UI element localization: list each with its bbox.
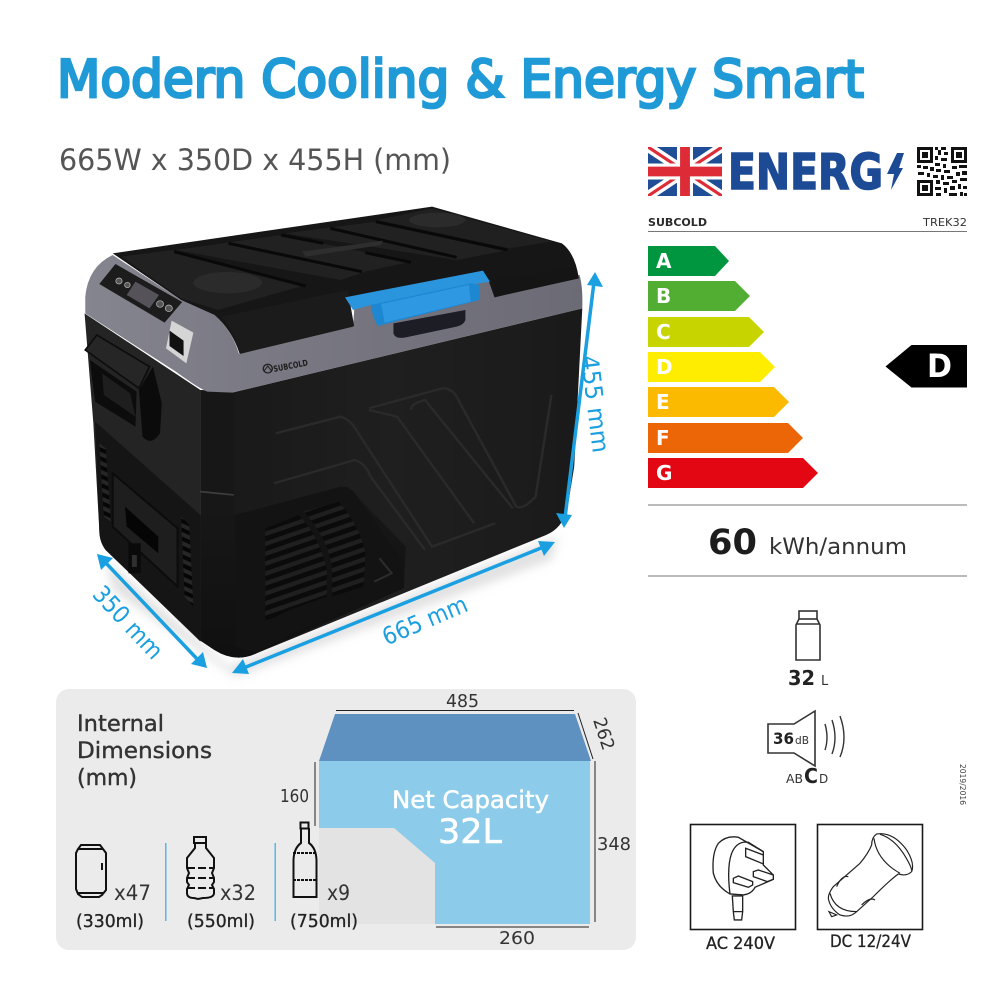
- rating B: [648, 281, 750, 311]
- icon: UK plug: [713, 837, 773, 920]
- floor shadow: [106, 537, 558, 677]
- icon: noise speaker: 36: [773, 729, 794, 748]
- model name: TREK32: [922, 216, 967, 229]
- label: AC 240V: [706, 934, 775, 954]
- title: Modern Cooling & Energy Smart: [57, 50, 864, 110]
- label: DC 12/24V: [830, 932, 911, 952]
- control panel: [99, 264, 182, 323]
- measurements: 485: [446, 691, 479, 712]
- heading: (mm): [77, 766, 137, 791]
- icon: noise speaker: [768, 711, 844, 766]
- icon: union flag: [648, 147, 722, 196]
- rating G: [648, 458, 818, 488]
- arrow: height: [556, 272, 603, 528]
- panel: internal dimensions: (330ml): [76, 911, 144, 932]
- capacity value: 32L: [438, 812, 502, 852]
- volume value: 32: [788, 666, 815, 690]
- grey lid band: [85, 255, 582, 393]
- text: bottles: x32: [220, 881, 256, 905]
- noise class: AB: [786, 772, 803, 786]
- black lid: [113, 207, 579, 354]
- noise class: [786, 764, 828, 788]
- rating marker: D: D: [927, 347, 952, 385]
- brand wordmark: SUBCOLD: [273, 358, 309, 375]
- brand logo: [263, 364, 272, 373]
- label: 665 mm: 665 mm: [378, 590, 472, 651]
- icon: water bottle: [187, 837, 214, 899]
- icon: can: [76, 845, 106, 897]
- rating A: A: [656, 249, 672, 273]
- rating B: B: [656, 284, 671, 308]
- annual energy consumption: 60: [708, 523, 757, 563]
- DC power box: [818, 824, 922, 952]
- rating D: D: [656, 355, 673, 379]
- measurements: 260: [499, 928, 535, 949]
- side socket panel: [99, 443, 193, 607]
- lid raised panels: [121, 208, 579, 353]
- measurements: 348: [597, 834, 631, 855]
- energy rating scale: [648, 246, 818, 488]
- heading: Dimensions: [77, 739, 212, 764]
- wordmark: energy: ENERG: [728, 144, 883, 201]
- measurements: 262: [588, 715, 618, 753]
- separator: [165, 843, 166, 921]
- icon: noise speaker: dB: [795, 735, 809, 747]
- icon: car charger: [828, 834, 913, 917]
- annual energy consumption: kWh/annum: [769, 535, 907, 560]
- rating C: C: [656, 320, 671, 344]
- volume value: L: [821, 674, 829, 689]
- annual energy consumption: [708, 523, 907, 563]
- separator: [274, 843, 276, 921]
- label: 455 mm: 455 mm: [575, 354, 615, 454]
- rating F: F: [656, 426, 670, 450]
- rating E: E: [656, 390, 670, 414]
- rating G: G: [656, 461, 672, 485]
- side lower recess: [95, 422, 200, 641]
- embossed front shapes: [274, 388, 551, 550]
- measurements: [280, 691, 631, 949]
- overall dimensions text: 665W x 350D x 455H (mm): [59, 143, 451, 177]
- front vent grilles: [265, 502, 392, 622]
- rating E: [648, 387, 789, 417]
- rating C: [648, 317, 764, 347]
- USB port: [166, 321, 193, 363]
- panel: internal dimensions: [56, 689, 636, 950]
- energy label header: [648, 144, 967, 201]
- left carry handle: [85, 335, 162, 441]
- icon: energy bolt: [887, 153, 904, 190]
- noise class: C: [804, 764, 818, 788]
- rating A: [648, 246, 729, 276]
- panel: internal dimensions: (750ml): [290, 911, 358, 932]
- blue handle: [345, 271, 490, 338]
- volume value: [788, 666, 829, 690]
- icon: QR code: [917, 147, 967, 196]
- label: 350 mm: 350 mm: [87, 580, 169, 665]
- box: [690, 824, 796, 930]
- rating F: [648, 423, 803, 453]
- arrow: width: [232, 541, 555, 674]
- lower base: [200, 487, 406, 658]
- rating marker: D: [886, 345, 967, 388]
- corner highlight: [200, 390, 234, 515]
- icon: volume container: [796, 611, 820, 660]
- icon: wine bottle: [293, 822, 317, 897]
- cooler side face: [85, 313, 200, 642]
- noise class: D: [819, 772, 828, 786]
- regulation number: 2019/2016: [958, 764, 967, 805]
- capacity label: Net Capacity: [392, 786, 549, 814]
- text: cans: x47: [114, 881, 151, 905]
- panel background: [56, 689, 636, 950]
- text: wine bottles: x9: [327, 881, 350, 905]
- arrow: depth: [97, 554, 207, 668]
- box: [818, 824, 922, 930]
- supplier name: SUBCOLD: [648, 216, 707, 229]
- heading: [77, 712, 212, 791]
- product: portable cooler: [85, 207, 582, 677]
- measurements: 160: [280, 786, 309, 807]
- rating D: [648, 352, 775, 382]
- cooler front face: [200, 308, 582, 658]
- compartment diagram: [315, 710, 595, 927]
- heading: Internal: [77, 712, 164, 737]
- front vent panel: [236, 487, 402, 653]
- panel: internal dimensions: (550ml): [187, 911, 255, 932]
- AC power box: [690, 824, 796, 954]
